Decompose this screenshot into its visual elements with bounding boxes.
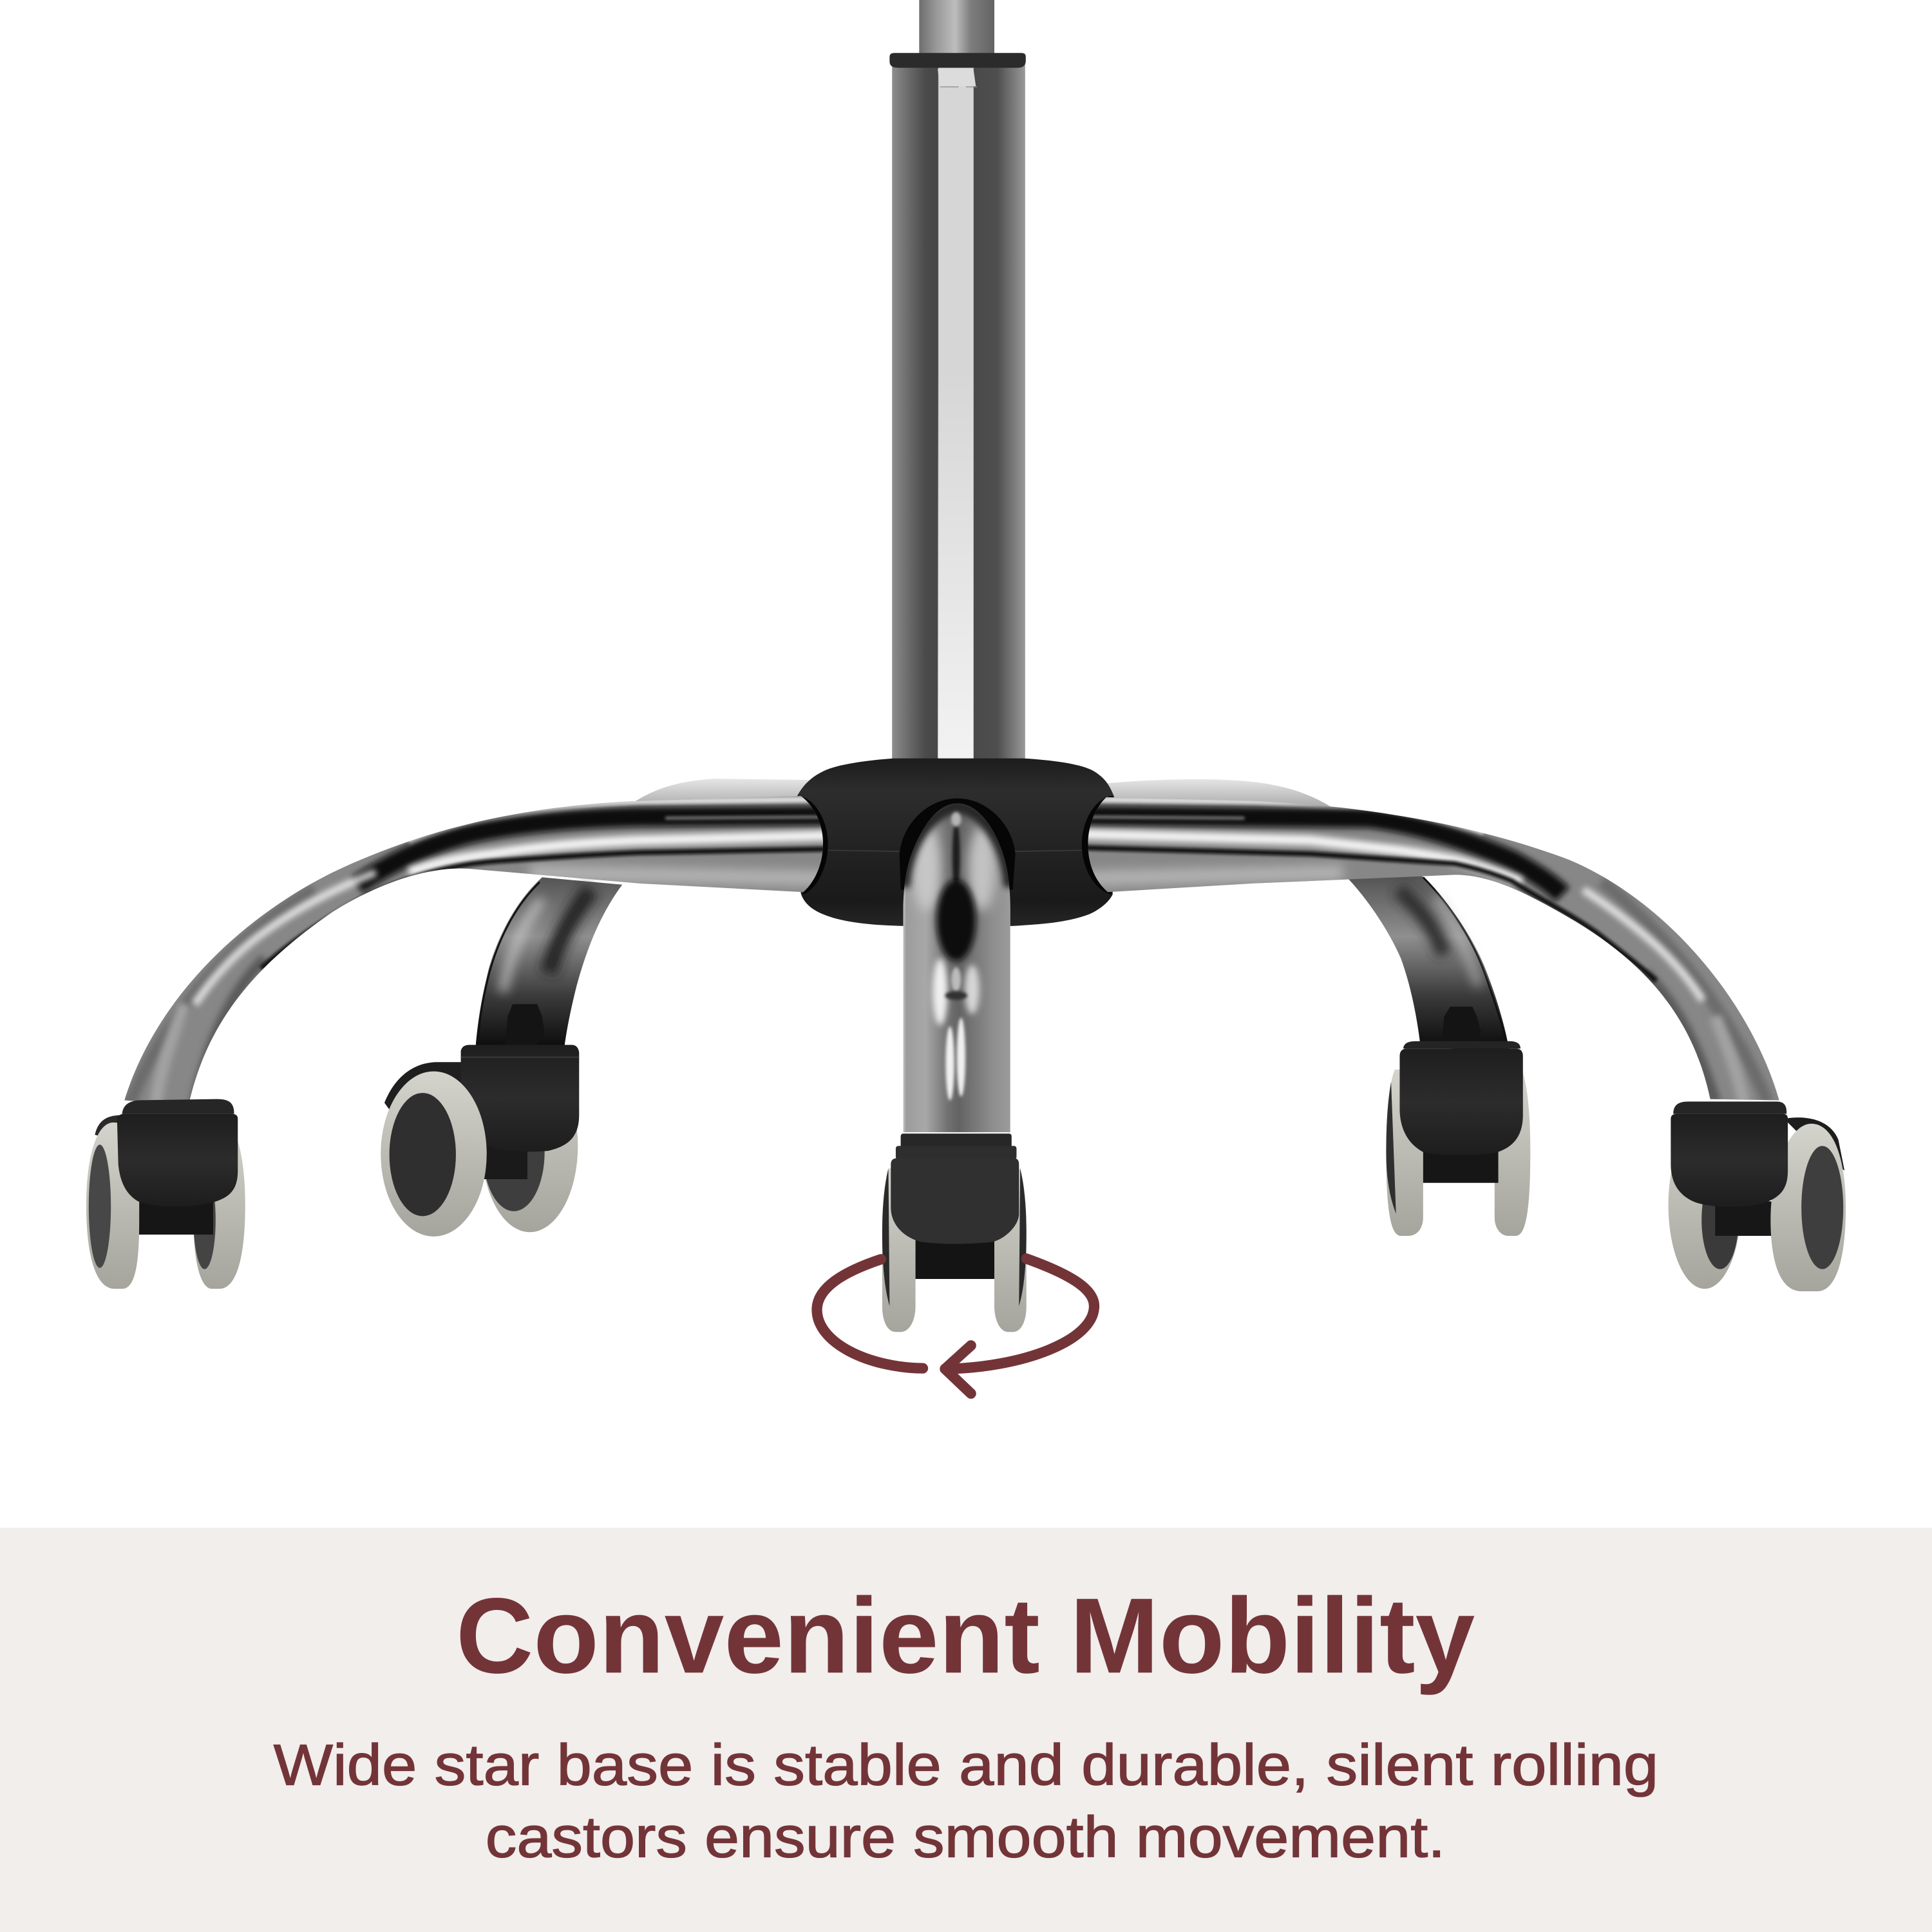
caption panel	[0, 1528, 1932, 1932]
body text line 2: castors ensure smooth movement.	[486, 1805, 1445, 1870]
rear left arm	[476, 877, 622, 1047]
inner gas-lift rod	[919, 0, 994, 57]
caster: front centre	[882, 1133, 1027, 1332]
caster: rear right	[1386, 1007, 1530, 1236]
chair base product illustration	[86, 0, 1846, 1332]
front centre arm	[900, 799, 1016, 1137]
outer chrome cylinder	[892, 64, 1025, 766]
body text line 1: Wide star base is stable and durable, silent rolling	[274, 1733, 1658, 1797]
caster: front left	[86, 1099, 245, 1289]
rotation arrow	[817, 1258, 1094, 1394]
caster: front right	[1669, 1101, 1846, 1291]
centre black hub	[797, 759, 1114, 926]
caster: rear left	[381, 1004, 579, 1236]
rear right arm	[1348, 875, 1510, 1051]
front right arm	[1088, 797, 1779, 1100]
rear arm upper surfaces	[629, 779, 1333, 813]
heading: Convenient Mobility	[456, 1576, 1475, 1696]
cylinder top collar	[889, 53, 1026, 68]
front left arm	[124, 796, 823, 1101]
